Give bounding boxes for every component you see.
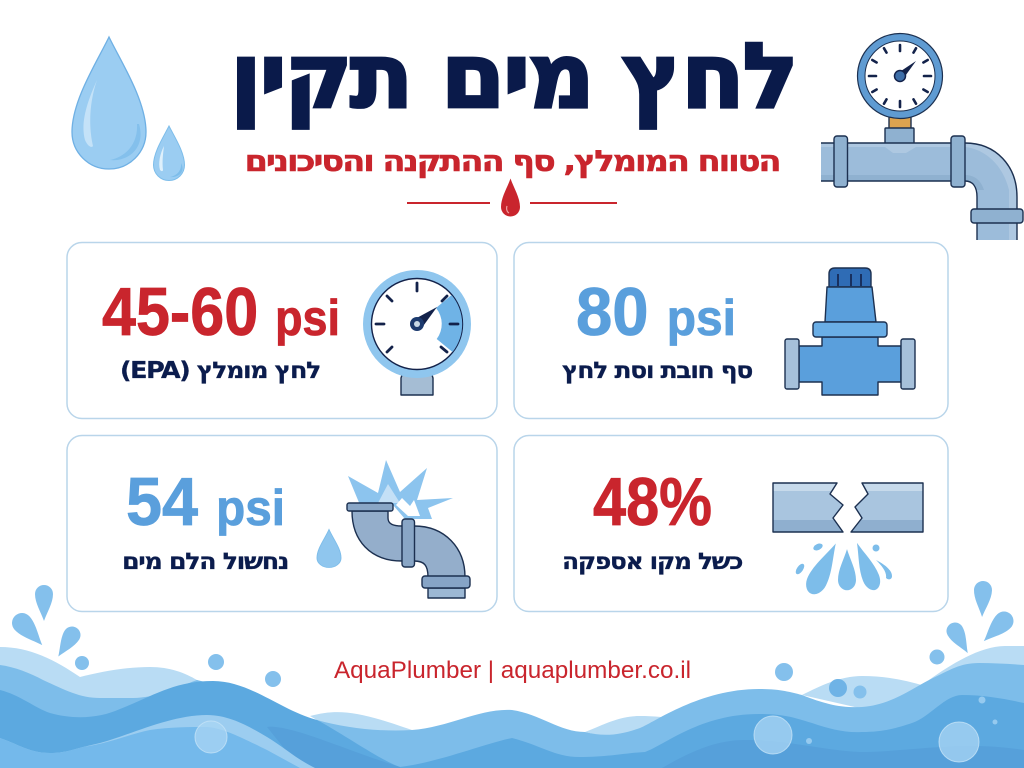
panel: supply line failure — [514, 436, 948, 612]
divider with red drop — [407, 178, 617, 216]
water splashes and bubbles — [8, 581, 1017, 698]
value: 54 psi: 54 psi — [126, 464, 285, 540]
value: 45-60 psi: 45-60 psi — [102, 274, 340, 350]
icon: pressure reducing valve — [785, 268, 915, 395]
label: valve threshold: סף חובת וסת לחץ — [562, 358, 753, 384]
subtitle: הטווח המומלץ, סף ההתקנה והסיכונים — [244, 144, 780, 178]
icon: water drops — [72, 37, 184, 180]
title: לחץ מים תקין — [230, 24, 796, 129]
footer brand: AquaPlumber | aquaplumber.co.il — [334, 657, 691, 684]
panel: safety valve threshold — [514, 242, 948, 418]
panel: water hammer — [67, 436, 497, 612]
panel: recommended pressure — [67, 242, 497, 418]
icon: broken pipe with spray — [773, 483, 923, 598]
icon: pressure gauge on pipe — [821, 34, 1023, 240]
value: 80 psi: 80 psi — [576, 274, 736, 350]
label: recommended pressure: לחץ מומלץ (EPA) — [120, 358, 320, 384]
icon: burst pipe — [347, 460, 470, 598]
label: supply line failure: כשל מקו אספקה — [562, 549, 742, 575]
icon: water drop — [317, 530, 341, 568]
icon: gauge — [363, 270, 471, 395]
label: water hammer surge: נחשול הלם מים — [122, 549, 288, 575]
value: 48%: 48% — [593, 464, 712, 540]
translucent bubbles — [195, 696, 998, 762]
waves — [0, 646, 1024, 768]
